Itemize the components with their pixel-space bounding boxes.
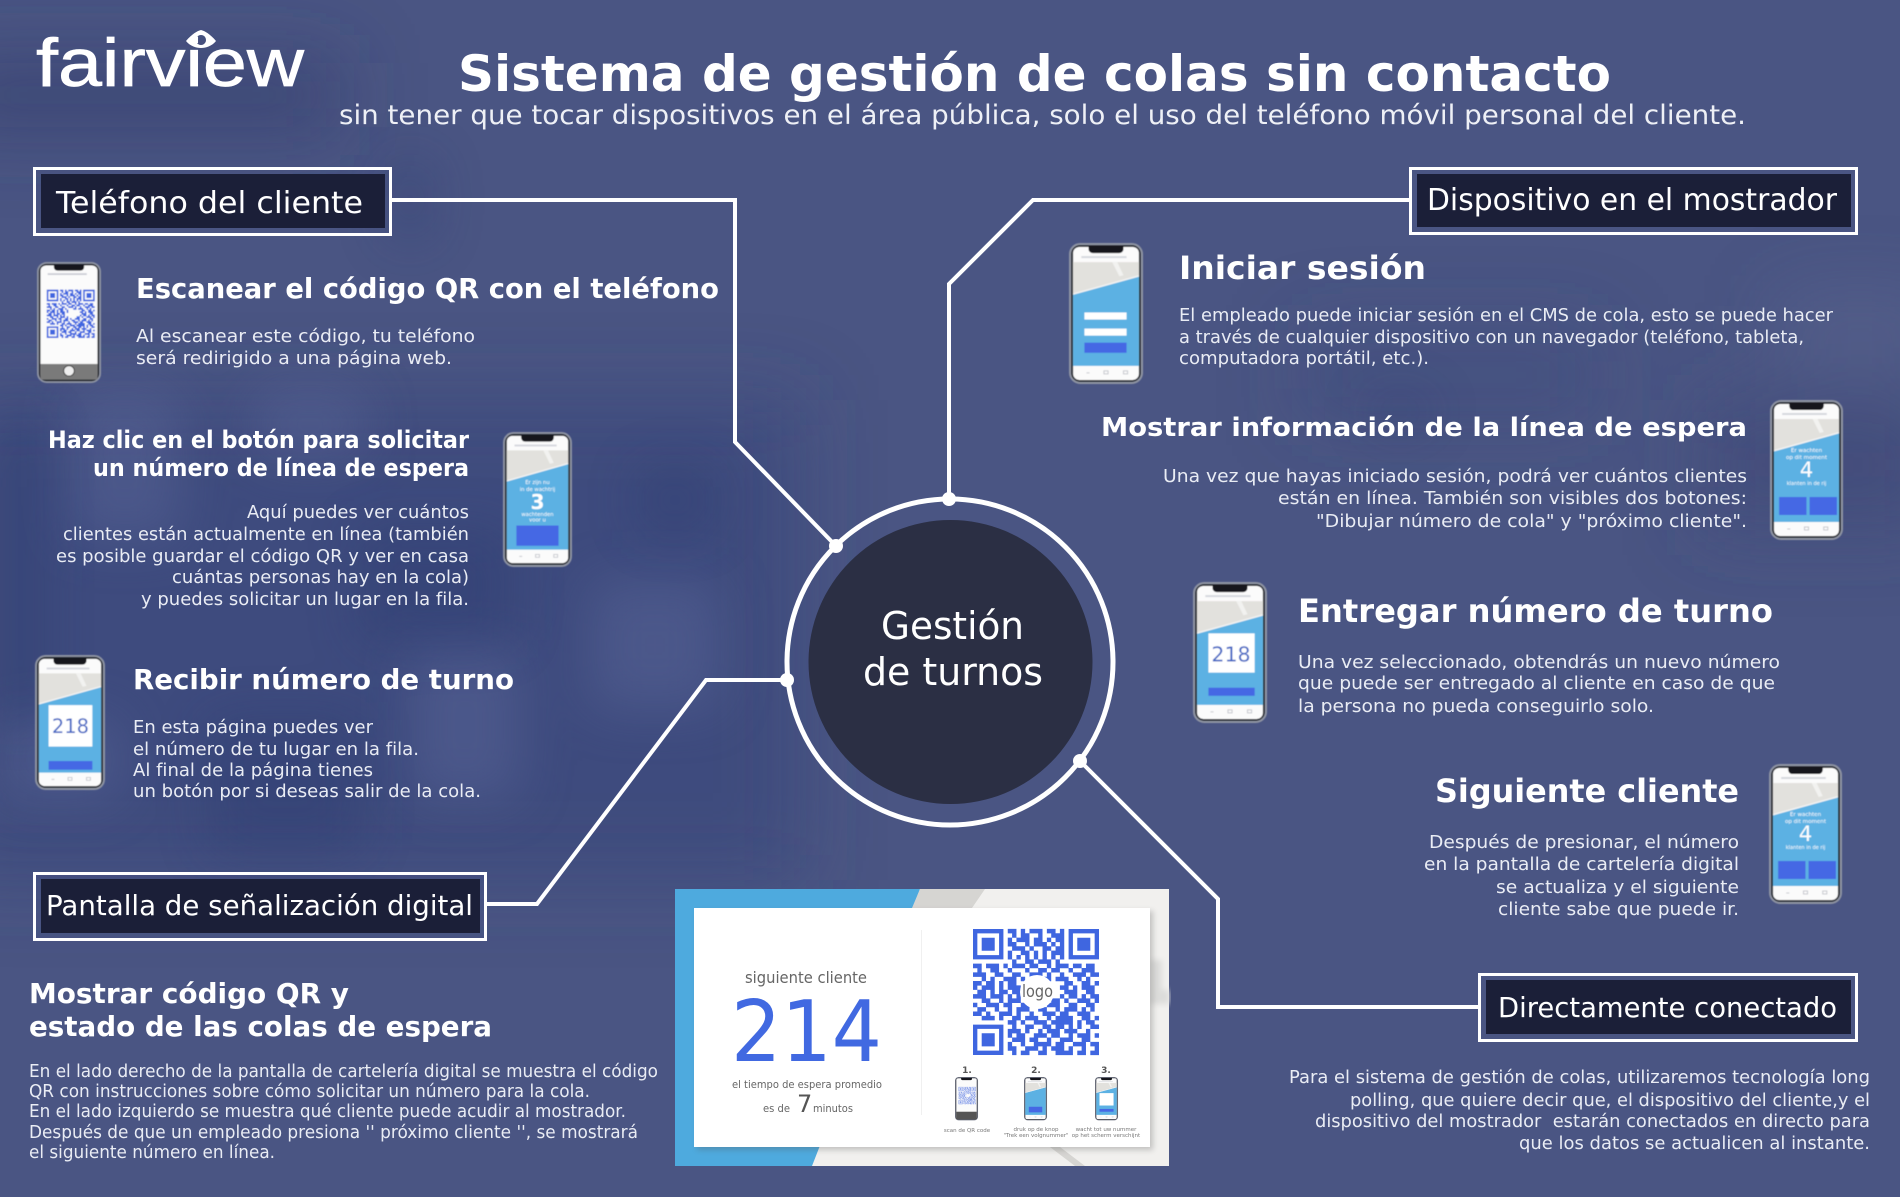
instruction phones: druk op de knop (1014, 1127, 1059, 1133)
icon: phone with login form (1070, 244, 1142, 383)
circle label: Gestión (881, 604, 1024, 648)
icon: phone with counter 4: klanten in de rij (1787, 481, 1826, 487)
label box: Pantalla de señalización digital: Pantalla de señalización digital (46, 889, 473, 922)
heading: Siguiente cliente (1435, 772, 1739, 810)
connector lines (392, 200, 1478, 1007)
description: Después de presionar, el número (1429, 832, 1739, 853)
description: cuántas personas hay en la cola) (172, 567, 469, 588)
description: a través de cualquier dispositivo con un navegador (teléfono, tableta, (1179, 327, 1804, 348)
step: Entregar número (1194, 583, 1780, 722)
description: En el lado izquierdo se muestra qué cliente puede acudir al mostrador. (29, 1102, 626, 1122)
digital signage screen (675, 889, 1169, 1166)
heading: estado de las colas de espera (29, 1011, 492, 1043)
description: la persona no pueda conseguirlo solo. (1298, 696, 1654, 717)
step: Escanear (38, 263, 719, 382)
description (1298, 652, 1780, 717)
label box: Directamente conectado (1480, 974, 1856, 1040)
icon: phone with counter 4 (1771, 401, 1842, 539)
description: Directamente conectado (1289, 1067, 1870, 1154)
icon: phone with button: wachtenden (521, 512, 554, 518)
icon: phone with QR code (38, 263, 100, 382)
next customer: es de (763, 1102, 790, 1115)
next customer: siguiente cliente (745, 968, 867, 987)
description: y puedes solicitar un lugar en la fila. (141, 589, 469, 610)
title (339, 45, 1746, 131)
description: Después de que un empleado presiona '' próximo cliente '', se mostrará (29, 1123, 638, 1143)
label box: Dispositivo en el mostrador (1410, 168, 1856, 234)
next customer: el tiempo de espera promedio (732, 1078, 882, 1091)
heading: Escanear el código QR con el teléfono (136, 273, 719, 305)
icon: phone with ticket 218 (1194, 583, 1266, 722)
instruction phones: wacht tot uw nummer (1076, 1127, 1137, 1133)
icon: phone with button: voor u (529, 518, 546, 524)
description (1163, 466, 1747, 532)
next customer: 7 (797, 1090, 812, 1118)
description: Aquí puedes ver cuántos (247, 502, 469, 523)
step: Recibir número (36, 656, 514, 802)
heading: Recibir número de turno (133, 664, 514, 696)
next customer: minutos (813, 1102, 853, 1115)
circle label: de turnos (863, 650, 1043, 694)
description: Directamente conectado: polling, que quiere decir que, el dispositivo del cliente,y el (1350, 1090, 1870, 1111)
icon: phone with button: 3 (530, 490, 544, 514)
description: clientes están actualmente en línea (también (63, 524, 469, 545)
instruction phones (944, 1066, 1141, 1139)
description (29, 1062, 658, 1163)
icon: phone with ticket 218: 218 (52, 715, 89, 738)
description (133, 717, 481, 802)
description (56, 502, 469, 610)
heading: un número de línea de espera (93, 454, 469, 482)
description: Directamente conectado: que los datos se actualicen al instante. (1519, 1133, 1870, 1154)
icon: phone with counter 4: 4 (1800, 457, 1813, 482)
next customer: 214 (731, 983, 882, 1082)
description: computadora portátil, etc.). (1179, 348, 1429, 369)
section: Mostrar código QR (29, 978, 658, 1163)
description: Directamente conectado: Para el sistema de gestión de colas, utilizaremos tecnología long (1289, 1067, 1870, 1088)
description: Una vez seleccionado, obtendrás un nuevo número (1298, 652, 1780, 673)
label box: Directamente conectado: Directamente conectado (1498, 991, 1837, 1024)
subtitle: sin tener que tocar dispositivos en el área pública, solo el uso del teléfono móvil personal del cliente. (339, 100, 1746, 131)
circle label (863, 604, 1043, 694)
step: Mostrar información (1101, 401, 1842, 539)
instruction phones: "Trek een volgnummer" (1003, 1133, 1069, 1139)
heading: Mostrar código QR y (29, 978, 349, 1010)
icon: phone with counter 4: Er wachten (1790, 812, 1822, 818)
step: Siguiente cliente (1424, 765, 1841, 920)
QR code (973, 929, 1099, 1055)
description: es posible guardar el código QR y ver en casa (56, 546, 469, 567)
QR code: logo (1022, 982, 1053, 1002)
description: en la pantalla de cartelería digital (1424, 854, 1739, 875)
description: QR con instrucciones sobre cómo solicitar un número para la cola. (29, 1082, 590, 1102)
description: están en línea. También son visibles dos botones: (1278, 488, 1747, 509)
label box: Pantalla de señalización digital (34, 874, 486, 940)
heading: Iniciar sesión (1179, 249, 1426, 287)
description (136, 326, 475, 369)
icon: eye above the i (186, 30, 216, 48)
description: el número de tu lugar en la fila. (133, 739, 419, 760)
description: cliente sabe que puede ir. (1498, 899, 1739, 920)
instruction phones: 1. (962, 1066, 972, 1076)
step: Haz clic (48, 426, 571, 610)
logo: fairview: fairview (36, 25, 305, 101)
description (1179, 305, 1834, 369)
icon: phone with ticket 218: 218 (1211, 643, 1251, 667)
description: En el lado derecho de la pantalla de cartelería digital se muestra el código (29, 1062, 658, 1082)
description: "Dibujar número de cola" y "próximo cliente". (1316, 511, 1747, 532)
description (1424, 832, 1739, 920)
next customer (731, 968, 882, 1118)
icon: phone with button: Er zijn nu (525, 480, 550, 486)
description: se actualiza y el siguiente (1496, 877, 1739, 898)
icon: phone with button: in de wachtrij (520, 487, 555, 493)
label box: Teléfono del cliente: Teléfono del cliente (55, 186, 363, 221)
central circle (780, 492, 1113, 825)
icon: phone with counter 4: klanten in de rij (1786, 845, 1825, 851)
description: un botón por si deseas salir de la cola. (133, 781, 481, 802)
connection nodes (780, 492, 1087, 768)
icon: phone with button (504, 433, 571, 566)
icon: phone with counter 4: Er wachten (1791, 448, 1823, 454)
title: Sistema de gestión de colas sin contacto (458, 45, 1611, 103)
heading: Entregar número de turno (1298, 592, 1773, 630)
step: Iniciar sesión (1070, 244, 1834, 383)
icon: phone with counter 4 (1770, 765, 1841, 903)
label box: Teléfono del cliente (34, 168, 390, 234)
heading: Mostrar información de la línea de espera (1101, 413, 1747, 443)
description: Al final de la página tienes (133, 760, 373, 781)
instruction phones: 3. (1101, 1066, 1111, 1076)
description: En esta página puedes ver (133, 717, 374, 738)
description: Una vez que hayas iniciado sesión, podrá ver cuántos clientes (1163, 466, 1747, 487)
description: Al escanear este código, tu teléfono (136, 326, 475, 347)
instruction phones: op het scherm verschijnt (1072, 1133, 1141, 1139)
white card (694, 908, 1150, 1147)
description: que puede ser entregado al cliente en caso de que (1298, 673, 1775, 694)
icon: phone with counter 4: op dit moment (1785, 819, 1827, 825)
description: El empleado puede iniciar sesión en el CMS de cola, esto se puede hacer (1179, 305, 1834, 326)
icon: phone with counter 4: op dit moment (1786, 455, 1828, 461)
icon: phone with ticket 218 (36, 656, 104, 789)
description: será redirigido a una página web. (136, 348, 452, 369)
heading (48, 426, 469, 482)
heading: Haz clic en el botón para solicitar (48, 426, 469, 454)
label box: Dispositivo en el mostrador: Dispositivo en el mostrador (1427, 183, 1838, 218)
icon: phone with counter 4: 4 (1799, 821, 1812, 846)
description: Directamente conectado: dispositivo del mostrador estarán conectados en directo para (1315, 1111, 1870, 1132)
instruction phones: 2. (1031, 1066, 1041, 1076)
instruction phones: scan de QR code (944, 1128, 991, 1134)
heading (29, 978, 492, 1043)
description: el siguiente número en línea. (29, 1143, 275, 1163)
